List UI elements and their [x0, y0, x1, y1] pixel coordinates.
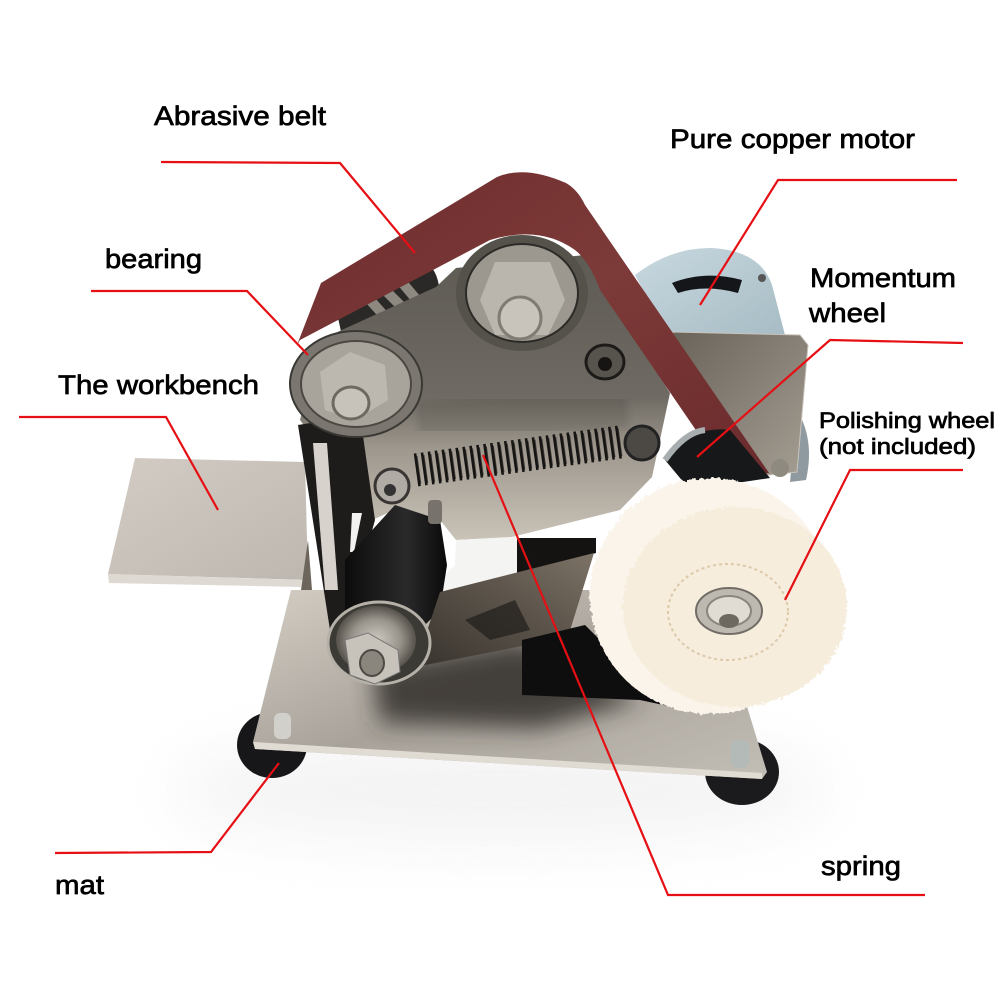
strap marking [465, 600, 530, 640]
line: abrasive belt [161, 162, 415, 253]
side arm [298, 415, 375, 630]
main plate [300, 255, 670, 540]
left bearing [290, 331, 422, 437]
label: momentum wheel: Momentum [810, 263, 956, 293]
lower black cylinder [345, 505, 447, 650]
line: polishing wheel [785, 470, 963, 600]
line: motor [700, 180, 957, 305]
top roller [456, 235, 588, 351]
label: mat: mat [55, 870, 105, 900]
label: spring: spring [821, 851, 901, 881]
abrasive belt [297, 172, 769, 477]
dark bearings behind [332, 262, 440, 370]
belt strap: back [415, 553, 594, 667]
line: mat [55, 763, 279, 853]
mat: left foot [237, 712, 307, 778]
bolt right [731, 740, 749, 768]
label: polishing wheel: Polishing wheel [819, 408, 995, 433]
spring [416, 442, 622, 470]
spring shade [420, 405, 625, 425]
spring screw left [375, 469, 409, 503]
base plate [237, 590, 779, 805]
motor mount plate [672, 332, 808, 476]
label: momentum wheel: wheel [808, 298, 886, 328]
hub [696, 588, 762, 634]
line: momentum wheel [697, 340, 963, 457]
lower roller [328, 602, 430, 684]
small screw [428, 500, 442, 524]
momentum wheel [665, 429, 789, 490]
hex screw [586, 345, 624, 379]
plate shadow [372, 640, 640, 728]
label: momentum wheel [808, 263, 956, 328]
polishing wheel [590, 478, 847, 714]
floor shadow [170, 735, 830, 845]
motor [635, 248, 809, 482]
label: abrasive belt: Abrasive belt [154, 101, 327, 131]
window [440, 537, 517, 597]
dark bracket right of window [517, 538, 596, 576]
label: pure copper motor: Pure copper motor [670, 124, 915, 154]
label: the workbench: The workbench [58, 370, 259, 400]
line: workbench [19, 417, 218, 510]
line: bearing [91, 291, 308, 355]
label: bearing: bearing [105, 244, 202, 274]
workbench [108, 458, 312, 590]
label: polishing wheel: (not included) [819, 434, 976, 459]
callout lines [19, 162, 963, 895]
line: spring [483, 455, 925, 895]
label: polishing wheel [819, 408, 995, 459]
spring screw right [625, 426, 659, 460]
bolt left [274, 713, 291, 739]
dark block under wheel [522, 625, 705, 714]
mat: right foot [705, 739, 779, 805]
